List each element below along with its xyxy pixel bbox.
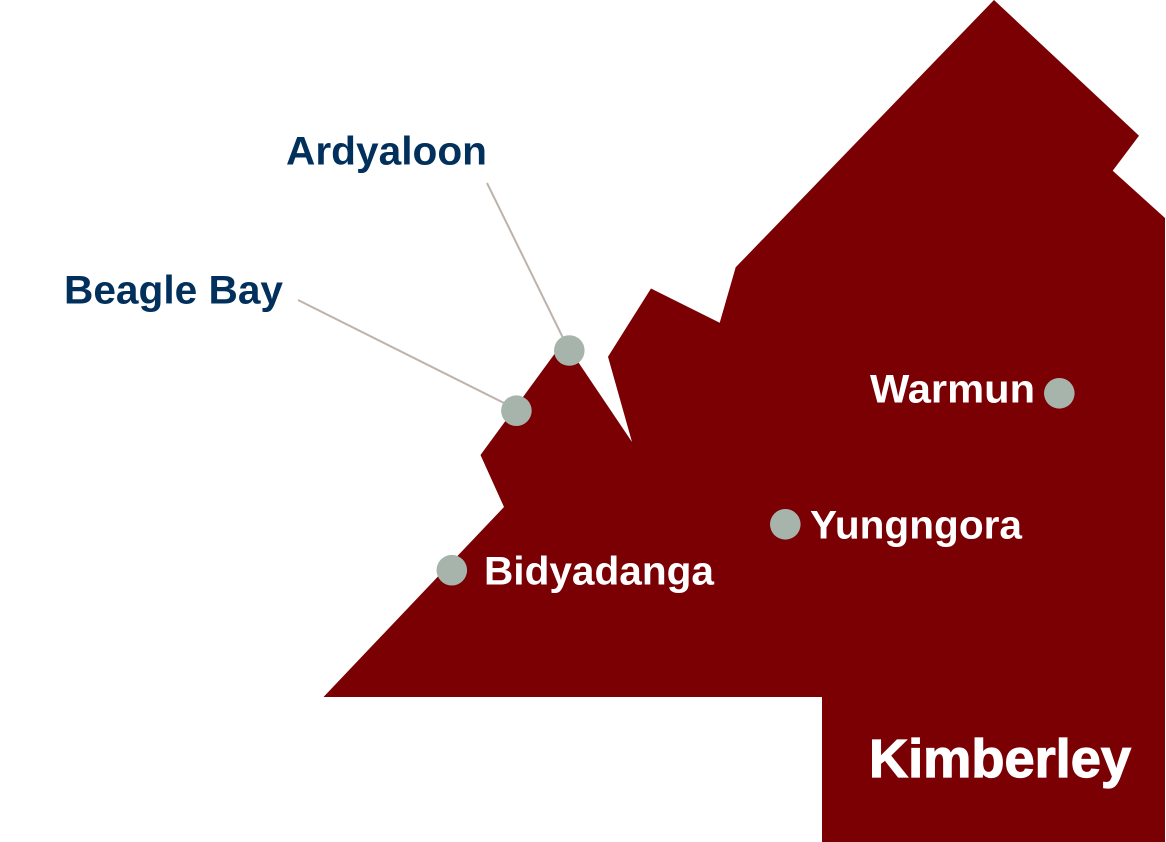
label: Kimberley: Kimberley [869, 729, 1131, 789]
marker: Ardyaloon [554, 335, 585, 366]
label: Ardyaloon: Ardyaloon [286, 129, 487, 173]
marker: Warmun [1044, 378, 1075, 409]
marker: Bidyadanga [436, 555, 467, 586]
region shape: Kimberley [324, 0, 1165, 842]
label: Beagle Bay: Beagle Bay [64, 268, 284, 312]
leader line: Ardyaloon [487, 183, 565, 342]
label: Warmun: Warmun [870, 367, 1035, 411]
leader line: Beagle Bay [298, 300, 510, 406]
marker: Beagle Bay [501, 395, 532, 426]
marker: Yungngora [770, 509, 801, 540]
label: Bidyadanga: Bidyadanga [484, 549, 715, 593]
label: Yungngora: Yungngora [810, 503, 1023, 547]
